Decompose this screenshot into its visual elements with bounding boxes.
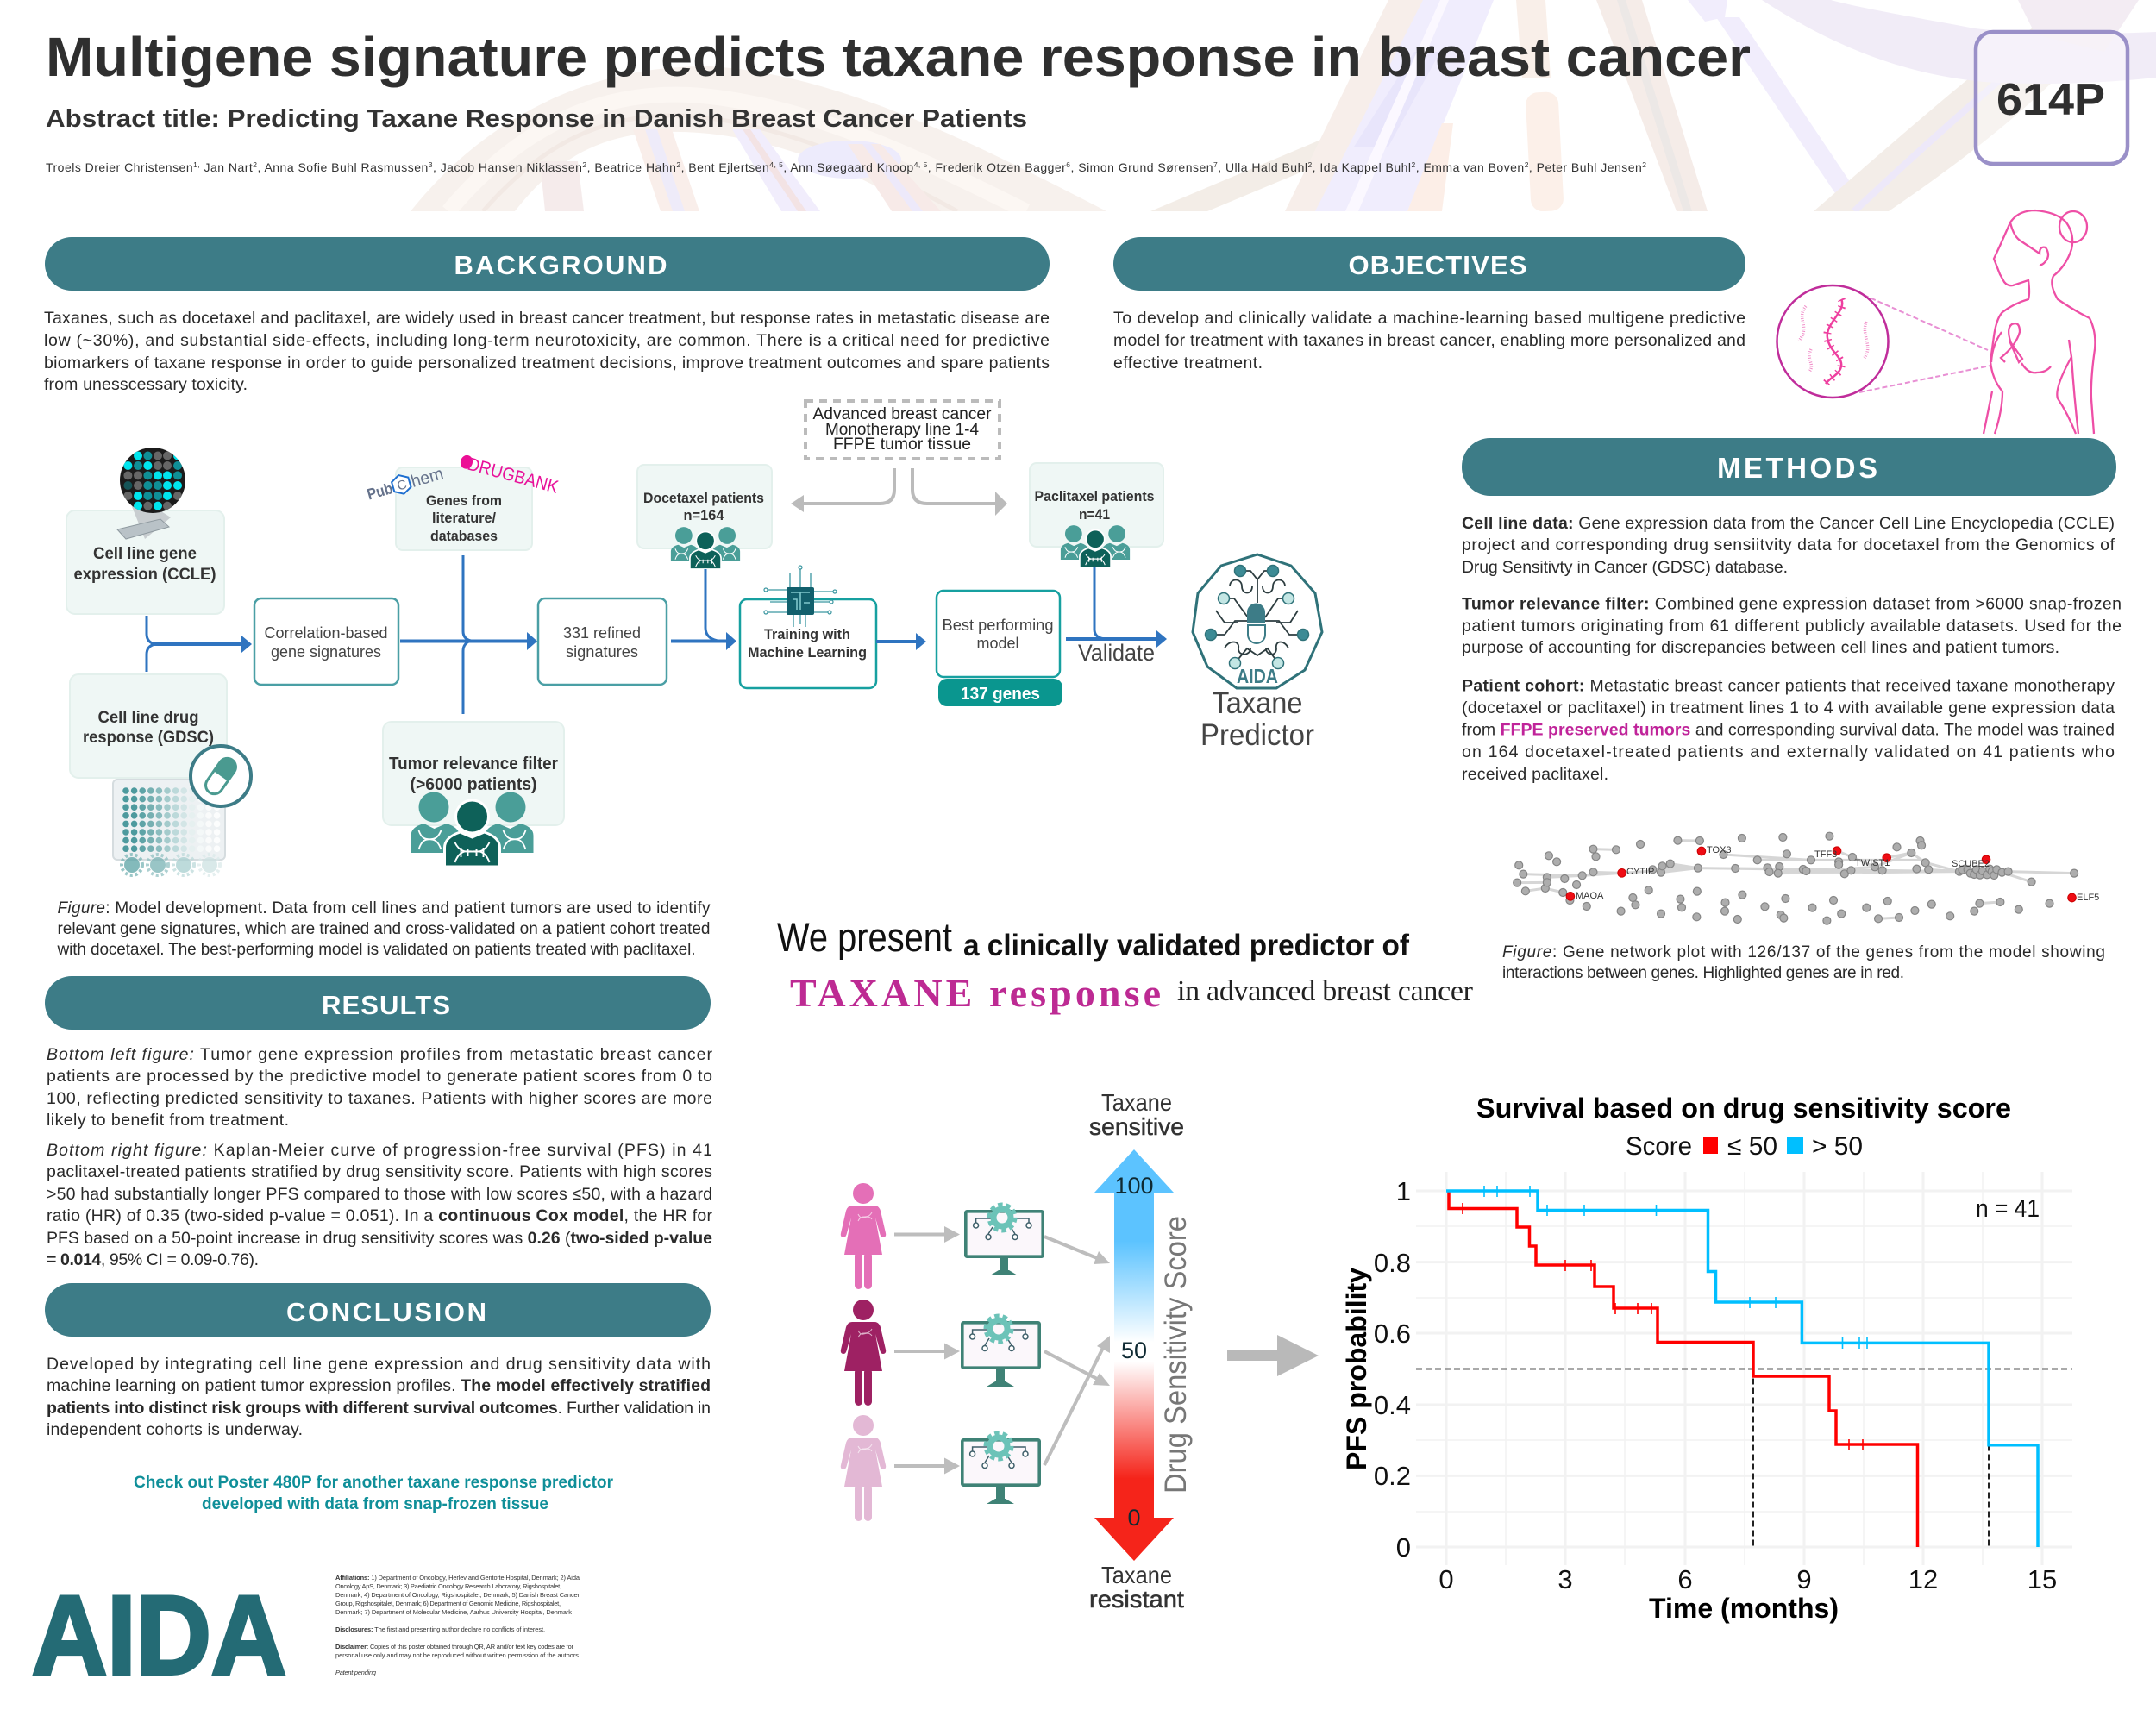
box: docetaxel patients: n=164 [683,507,724,523]
authors: 2 [1642,160,1646,169]
chart: gene network: TOX3 [1707,845,1732,855]
header DNA background [411,0,2156,212]
y-axis ticks: 0.8 [1374,1248,1411,1278]
figure caption: model development: relevant gene signatures, which are trained and cross-validated on a patient cohort treated [57,920,711,938]
methods: cell line data: project and corresponding drug sensiitvity data for docetaxel from the Genomics of [1462,536,2115,554]
results text: bottom left figure [47,1045,712,1130]
box: 331 refined signatures [538,598,667,685]
chart: gene network: MAOA [1576,891,1604,901]
icon: woman with magnified tumor RNA [1777,210,2095,434]
drug sensitivity score arrow: 0 [1127,1505,1141,1531]
badge: 137 genes [938,679,1062,706]
authors: 1, [193,160,200,169]
arrow: docetaxel and signatures to training [671,569,736,650]
icon: paclitaxel patients group [1061,525,1130,567]
icon: docetaxel patients group [671,527,740,569]
icon: patient 3 [841,1415,886,1521]
conclusion text: machine learning on patient tumor expression profiles. The model effectively stratified [47,1376,711,1395]
authors: 6 [1066,160,1070,169]
key message: TAXANE response [790,971,1161,1015]
sample size: n = 41 [1976,1195,2040,1223]
box: training with machine learning [740,599,876,688]
results text: bottom right figure [47,1141,712,1269]
label: taxane sensitive: Taxane [1101,1089,1172,1116]
arrow: signatures to refined signatures [400,555,537,714]
authors: , Ida Kappel Buhl [1313,160,1411,174]
logo: PubChem: C [395,477,409,494]
results text: bottom right figure: Bottom right figure: Kaplan-Meier curve of progression-free survival (PFS) in 41 [47,1141,712,1160]
box: cell line drug response: response (GDSC) [83,729,214,747]
y-axis ticks [1374,1176,1411,1563]
results text: bottom right figure: PFS based on a 50-point increase in drug sensitivity scores was 0.26 (two-sided p-value [47,1229,712,1248]
icon: well plate with cells [113,780,225,875]
methods: tumor relevance filter: patient tumors originating from 61 different publicly available datasets. Used for the [1462,617,2122,636]
arrows: model to score [1044,1237,1110,1465]
box: paclitaxel patients: Paclitaxel patients [1035,488,1154,504]
authors: 2 [1307,160,1312,169]
figure: patient scoring schematic [841,1089,1193,1613]
x-axis ticks: 3 [1557,1564,1573,1594]
figure caption: model development: Figure: Model development. Data from cell lines and patient tumors are used to identify [57,899,711,918]
icon: model computer 2 [962,1316,1039,1387]
x-axis ticks: 0 [1438,1564,1454,1594]
methods: cell line data: Cell line data: Gene expression data from the Cancer Cell Line Encyclopedia (CCLE) [1462,514,2115,533]
authors: , Ulla Hald Buhl [1218,160,1307,174]
results text: bottom right figure: paclitaxel-treated patients stratified by drug sensitivity score. Patients with high scores [47,1162,712,1181]
title: Multigene signature predicts taxane response in breast cancer [46,26,1751,88]
icon: tumor patients group [411,792,533,867]
label: taxane sensitive [1089,1089,1184,1140]
affiliations and disclosures: personal use only and may not be reproduced without written permission of the authors. [335,1651,580,1659]
arrows: patients to model [894,1226,960,1475]
objectives text: To develop and clinically validate a machine-learning based multigene predictive [1113,309,1745,328]
label: taxane resistant: Taxane [1101,1562,1172,1588]
box: tumor relevance filter: Tumor relevance filter [389,755,558,774]
label: taxane predictor [1200,686,1314,752]
objectives text: model for treatment with taxanes in breast cancer, enabling more personalized and [1113,331,1745,350]
box: correlation-based gene signatures: Correlation-based [264,624,388,642]
box: best performing model [937,591,1060,677]
results text: bottom right figure: ratio (HR) of 0.35 (two-sided p-value = 0.051). In a continuous Cox model, the HR for [47,1206,712,1225]
box: genes from literature: literature/ [432,510,496,526]
x-axis ticks: 6 [1677,1564,1693,1594]
panel: model development flow diagram [66,401,1322,875]
label: taxane resistant: resistant [1089,1586,1184,1613]
authors: , Jacob Hansen Niklassen [433,160,582,174]
box: best performing model: model [976,635,1019,652]
authors: , Emma van Boven [1416,160,1524,174]
objectives text: effective treatment. [1113,354,1263,373]
drug sensitivity score arrow: 50 [1121,1337,1147,1363]
x-axis ticks [1438,1564,2057,1594]
x-axis title: Time (months) [1649,1593,1839,1624]
box: best performing model: Best performing [942,617,1054,634]
affiliations and disclosures [335,1574,580,1676]
methods heading [1462,438,2116,496]
authors: 2 [253,160,257,169]
authors: , Bent Ejlertsen [681,160,769,174]
label: taxane predictor: Taxane [1213,686,1302,720]
box: docetaxel patients [637,465,772,548]
box: 331 refined signatures: signatures [566,643,638,661]
authors: Troels Dreier Christensen [46,160,193,174]
drug sensitivity score arrow [1094,1149,1174,1561]
conclusion text: Developed by integrating cell line gene expression and drug sensitivity data with [47,1355,711,1374]
authors: 7 [1213,160,1218,169]
y-axis title: PFS probability [1341,1268,1372,1470]
logo: PubChem [365,463,446,504]
label: drug sensitivity score: Drug Sensitivity Score [1159,1216,1193,1494]
icon: microarray [117,448,185,539]
methods: patient cohort: (docetaxel or paclitaxel) in treatment lines 1 to 4 with available gene expression data [1462,698,2115,717]
box: genes from literature: Genes from [426,492,502,509]
methods heading: METHODS [1717,452,1877,484]
chart: gene network: CYTIP [1626,867,1654,877]
callout: poster 480P: Check out Poster 480P for another taxane response predictor [134,1474,614,1492]
logo: AIDA: AIDA [32,1572,286,1698]
authors: 4, 5 [914,160,928,169]
box: cell line drug response: Cell line drug [98,709,198,727]
chart: gene network: TWIST1 [1855,858,1890,868]
icon: taxane predictor badge [1193,554,1322,688]
poster number box: 614P [1996,75,2105,125]
chart legend: > 50 [1812,1132,1863,1161]
affiliations and disclosures: Patent pending [335,1669,377,1676]
icon: drug capsule [191,746,251,806]
chart: gene network: SCUBE2 [1952,859,1990,869]
conclusion heading: CONCLUSION [286,1297,486,1327]
authors: , Beatrice Hahn [587,160,676,174]
conclusion text [47,1355,711,1439]
background text: biomarkers of taxane response in order to guide personalized treatment decisions, improve treatment outcomes and spare patients [44,354,1050,373]
arrows: cohort split to docetaxel and paclitaxel [791,468,1007,516]
figure caption: model development: with docetaxel. The best-performing model is validated on patients treated with paclitaxel. [57,941,695,959]
box: training with machine learning: Training with [764,626,850,642]
arrow: training to best model [876,633,926,650]
label: taxane predictor: Predictor [1200,718,1314,752]
conclusion heading [45,1283,711,1337]
median lines [1416,1369,2072,1547]
results text: bottom left figure: Bottom left figure: Tumor gene expression profiles from metastatic breast cancer [47,1045,712,1064]
drug sensitivity score arrow: 100 [1114,1173,1154,1199]
chart legend [1626,1132,1863,1161]
panel: methods [1462,438,2122,784]
affiliations and disclosures: Affiliations: 1) Department of Oncology, Herlev and Gentofte Hospital, Denmark; 2) Aida [335,1574,580,1582]
results text: bottom right figure: = 0.014, 95% CI = 0.09-0.76). [47,1250,259,1269]
methods: patient cohort: from FFPE preserved tumors and corresponding survival data. The model was trained [1462,721,2115,740]
authors: 4, 5 [769,160,783,169]
background heading [45,237,1050,291]
conclusion text: patients into distinct risk groups with different survival outcomes. Further validation in [47,1399,711,1418]
curve: score above 50 [1446,1186,2038,1547]
icon: model computer 1 [966,1205,1043,1275]
chart: gene network: TFF3 [1814,849,1837,860]
results text: bottom left figure: likely to benefit from treatment. [47,1111,289,1130]
box: advanced breast cancer cohort [805,401,1000,459]
icon: patient 2 [841,1300,886,1406]
affiliations and disclosures: Group, Rigshospitalet, Denmark; 6) Department of Genomic Medicine, Rigshospitalet, [335,1600,561,1607]
panel: background [44,237,1050,394]
logo: DrugBank: DRUGBANK [466,454,561,498]
x-axis ticks: 12 [1908,1564,1938,1594]
callout: poster 480P [134,1474,614,1513]
chart: Kaplan-Meier survival [1341,1093,2072,1624]
panel: conclusion [45,1283,711,1513]
results heading: RESULTS [322,990,450,1020]
objectives heading [1113,237,1745,291]
box: cell line gene expression: expression (CCLE) [74,566,216,584]
background heading: BACKGROUND [454,250,667,280]
affiliations and disclosures: Denmark; 4) Department of Oncology, Rigshospitalet, Denmark; 5) Danish Breast Cancer [335,1591,580,1599]
methods: patient cohort: received paclitaxel. [1462,765,1608,784]
box: advanced breast cancer cohort: FFPE tumor tissue [833,435,971,454]
conclusion text: independent cohorts is underway. [47,1420,303,1439]
chart legend: Score [1626,1132,1692,1161]
authors: , Simon Grund Sørensen [1071,160,1213,174]
authors: 2 [676,160,680,169]
figure caption: gene network [1502,943,2105,982]
results heading [45,976,711,1030]
box: correlation-based gene signatures [254,598,398,685]
callout: poster 480P: developed with data from snap-frozen tissue [202,1495,548,1513]
key message: a clinically validated predictor of [963,929,1409,962]
figure caption: model development [57,899,711,959]
arrow: schematic to survival plot [1227,1335,1319,1376]
label: taxane resistant [1089,1562,1184,1613]
abstract title: Abstract title: Predicting Taxane Response in Danish Breast Cancer Patients [46,105,1027,133]
box: genes from literature: databases [430,528,498,544]
methods: tumor relevance filter: purpose of accounting for discrepancies between cell lines and patient tumors. [1462,638,2059,657]
key message: in advanced breast cancer [1177,975,1474,1007]
background text [44,309,1050,394]
box: advanced breast cancer cohort: Advanced breast cancer [812,405,992,423]
y-axis ticks: 1 [1396,1176,1411,1206]
authors: 2 [1412,160,1416,169]
box: cell line gene expression: Cell line gene [93,545,197,563]
authors: 3 [429,160,433,169]
box: docetaxel patients: Docetaxel patients [643,490,764,506]
key message: We present [777,914,952,960]
chart: gene network: ELF5 [2077,893,2099,903]
x-axis ticks: 15 [2028,1564,2057,1594]
icon: AI chip [764,566,837,627]
affiliations and disclosures: Oncology ApS, Denmark; 3) Paediatric Oncology Research Laboratory, Rigshospitalet, [335,1582,561,1590]
y-axis ticks: 0.4 [1374,1390,1411,1420]
authors: , Peter Buhl Jensen [1529,160,1642,174]
box: 331 refined signatures: 331 refined [563,624,641,642]
results text: bottom left figure: patients are processed by the predictive model to generate patient scores from 0 to [47,1067,712,1086]
y-axis ticks: 0.6 [1374,1319,1411,1349]
box: correlation-based gene signatures: gene signatures [271,643,381,661]
objectives heading: OBJECTIVES [1349,250,1526,280]
badge: 137 genes: 137 genes [961,685,1040,704]
objectives text [1113,309,1745,373]
background text: from unesscessary toxicity. [44,375,248,394]
authors: , Frederik Otzen Bagger [928,160,1066,174]
box: genes from literature [396,467,532,550]
chart legend: ≤ 50 [1727,1132,1777,1161]
panel: results [45,976,712,1269]
methods: patient cohort [1462,676,2115,784]
icon: taxane predictor badge: AIDA [1237,665,1278,687]
background text: Taxanes, such as docetaxel and paclitaxel, are widely used in breast cancer treatment, but response rates in metastatic disease are [44,309,1050,328]
box: paclitaxel patients [1030,463,1163,547]
affiliations and disclosures: Disclaimer: Copies of this poster obtained through QR, AR and/or text key codes are for [335,1643,574,1650]
chart: gene network [1514,832,2099,924]
box: tumor relevance filter: (>6000 patients) [411,775,536,794]
arrow: validate: Validate [1078,640,1155,666]
results text: bottom left figure: 100, reflecting predicted sensitivity to taxanes. Patients with higher scores are more [47,1089,712,1108]
label: taxane sensitive: sensitive [1089,1113,1184,1140]
icon: patient 1 [841,1183,886,1289]
affiliations and disclosures: Denmark; 7) Department of Molecular Medicine, Aarhus University Hospital, Denmark [335,1608,572,1616]
logo: PubChem: Pub [365,479,395,504]
key message [777,914,1474,1015]
methods: cell line data [1462,514,2115,577]
box: cell line gene expression [66,510,224,614]
logo: PubChem: hem [409,464,446,492]
box: cell line drug response [70,674,227,778]
arrow: cell line inputs to signatures [147,616,252,672]
box: paclitaxel patients: n=41 [1079,506,1110,523]
figure caption: gene network: Figure: Gene network plot with 126/137 of the genes from the model showing [1502,943,2105,961]
background text: low (~30%), and substantial side-effects, including long-term neurotoxicity, are common. There is a critical need for predictive [44,331,1050,350]
authors: 2 [1525,160,1529,169]
results text: bottom right figure: >50 had substantially longer PFS compared to those with low scores ≤50, with a hazard [47,1185,712,1204]
plot grid [1416,1172,2072,1565]
methods: patient cohort: Patient cohort: Metastatic breast cancer patients that received taxane monotherapy [1462,676,2115,695]
box: training with machine learning: Machine Learning [748,644,867,661]
methods: tumor relevance filter [1462,595,2122,657]
curve: score at most 50 [1449,1191,1918,1547]
authors: , Anna Sofie Buhl Rasmussen [258,160,428,174]
box: advanced breast cancer cohort: Monotherapy line 1-4 [825,421,979,439]
poster number box [1976,32,2128,164]
arrow: validate [1066,567,1167,666]
authors: Jan Nart [200,160,253,174]
box: tumor relevance filter [383,722,564,825]
methods: patient cohort: on 164 docetaxel-treated patients and externally validated on 41 patients who [1462,742,2115,761]
y-axis ticks: 0.2 [1374,1461,1411,1491]
chart title: Survival based on drug sensitivity score [1476,1093,2011,1124]
x-axis ticks: 9 [1796,1564,1812,1594]
panel: objectives [1113,237,1745,373]
methods: tumor relevance filter: Tumor relevance filter: Combined gene expression dataset from >6000 snap-frozen [1462,595,2122,614]
authors: , Ann Søegaard Knoop [783,160,913,174]
figure caption: gene network: interactions between genes. Highlighted genes are in red. [1502,964,1904,982]
y-axis ticks: 0 [1396,1532,1411,1563]
affiliations and disclosures: Disclosures: The first and presenting author declare no conflicts of interest. [335,1625,545,1633]
authors: 2 [582,160,586,169]
methods: cell line data: Drug Sensitivty in Cancer (GDSC) database. [1462,558,1788,577]
icon: model computer 3 [962,1433,1039,1504]
